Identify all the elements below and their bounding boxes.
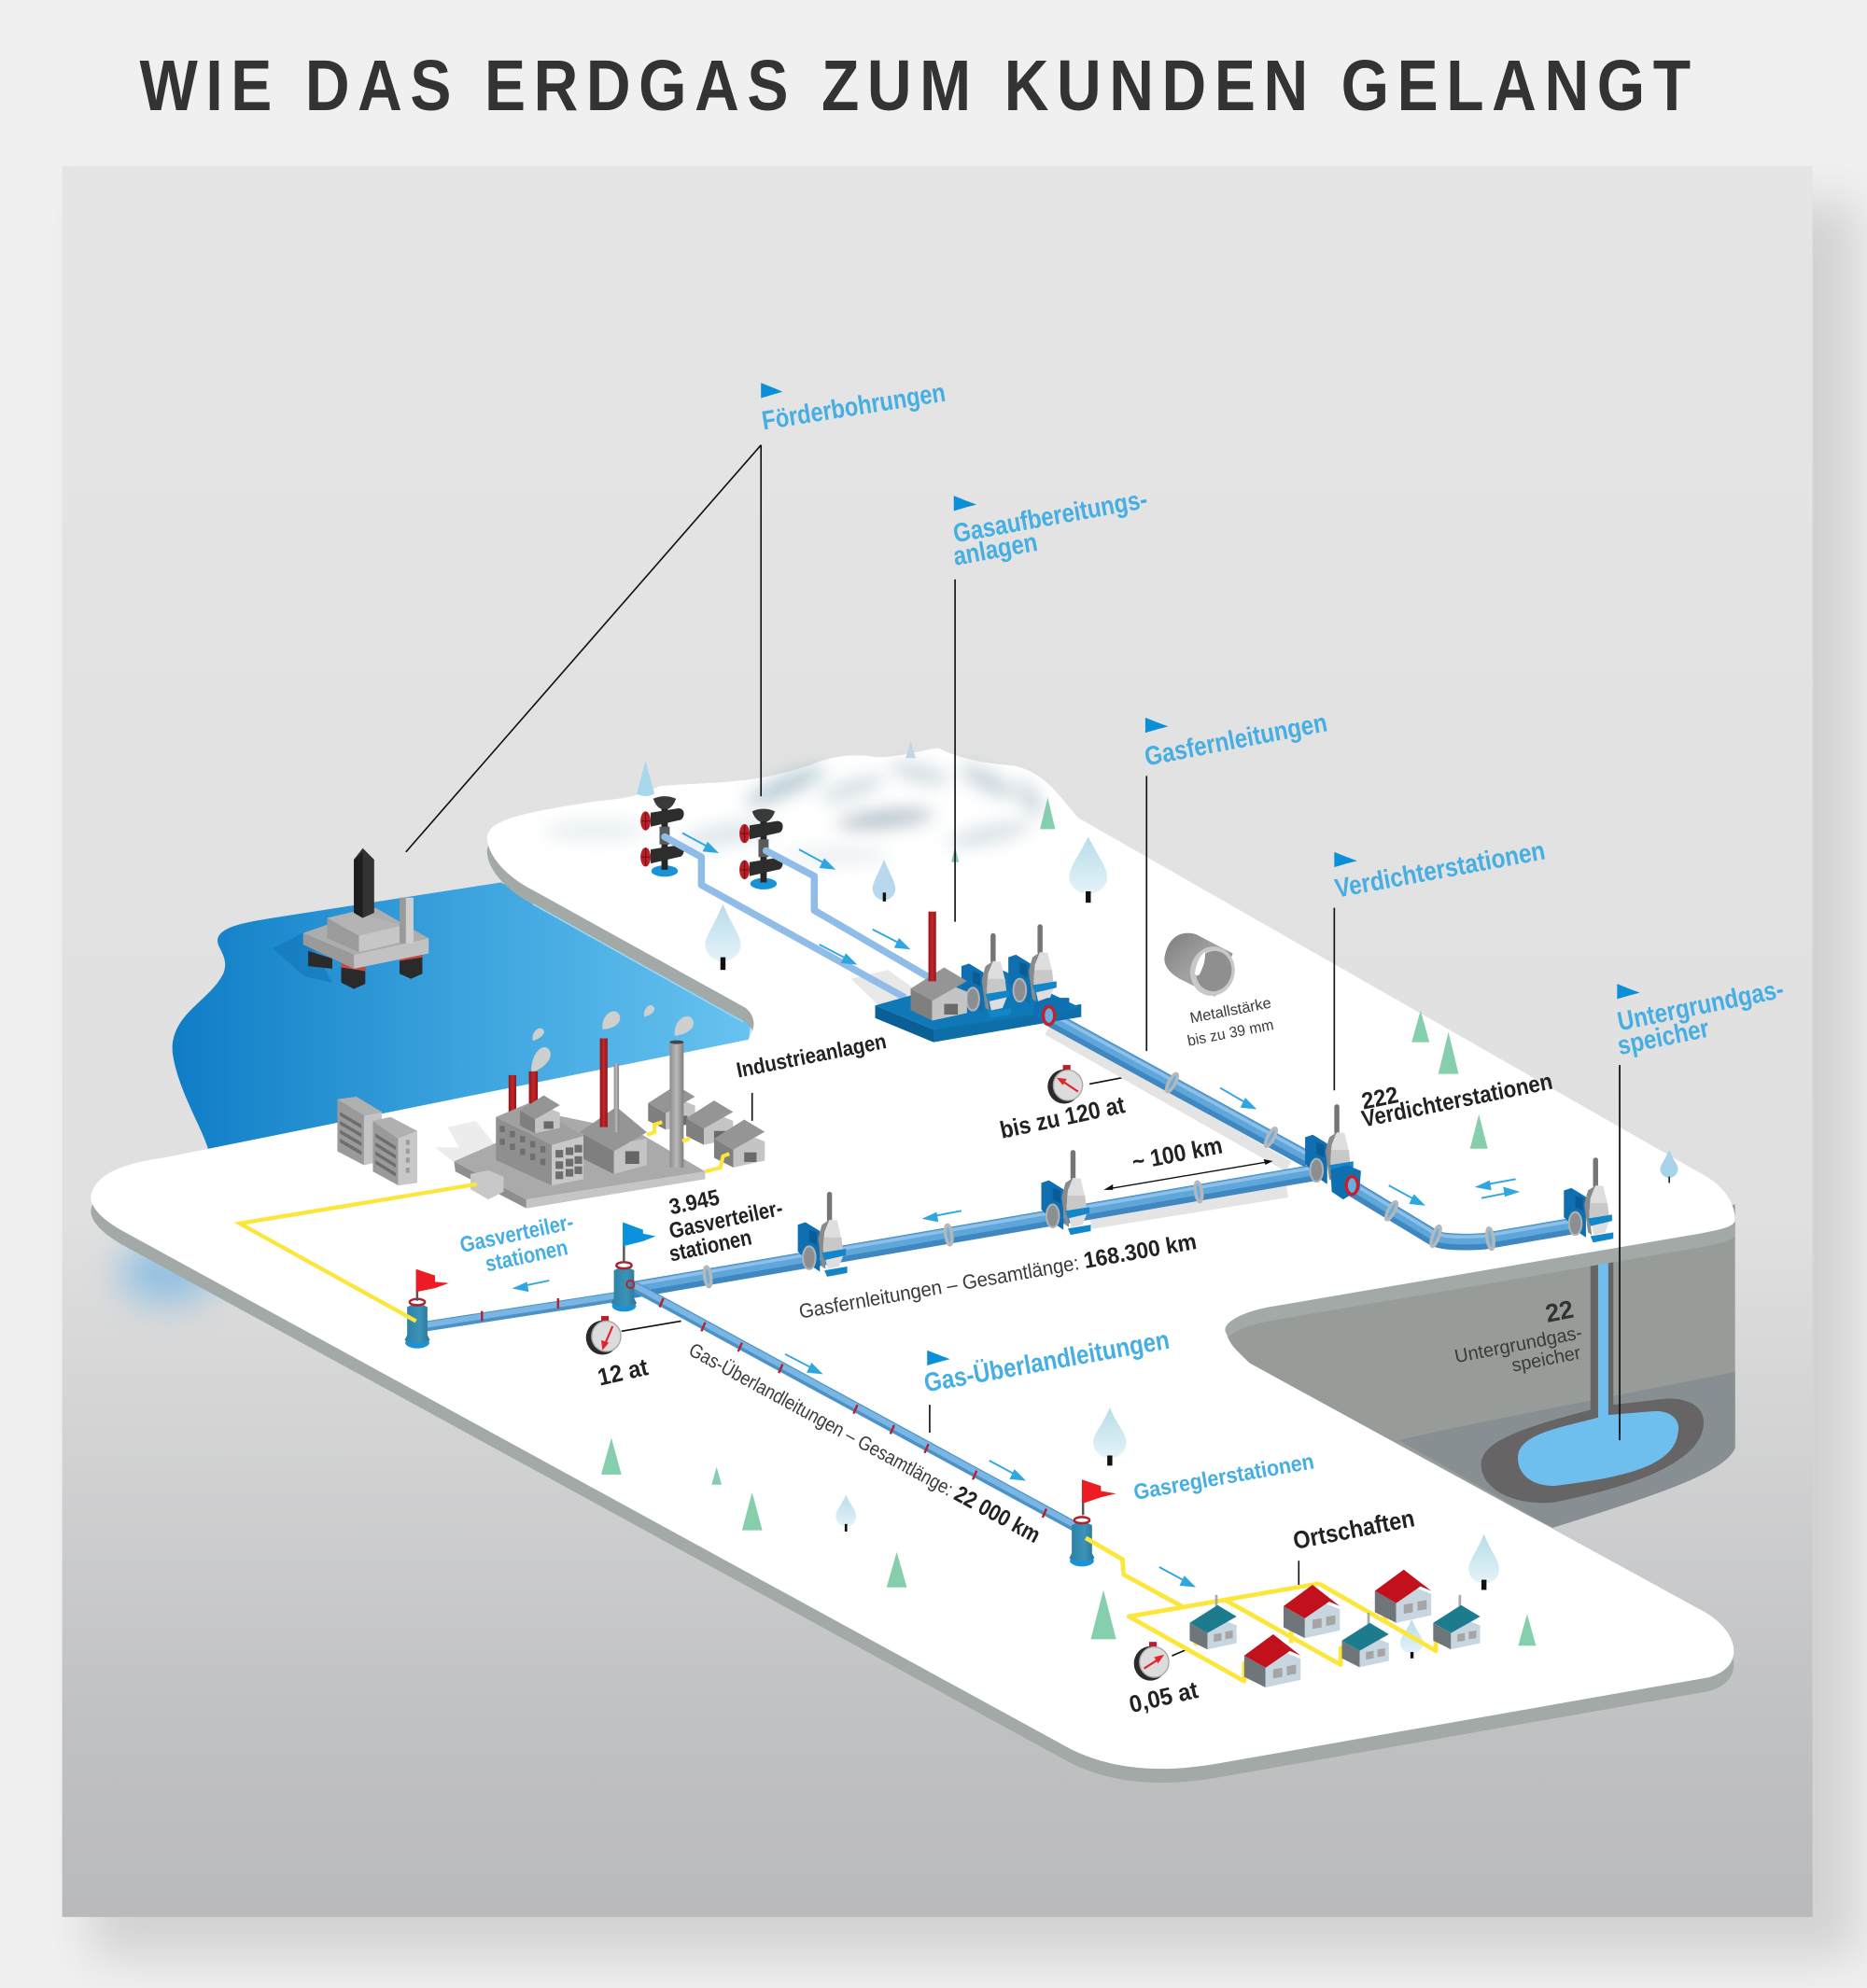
label: 12 at: 12 at xyxy=(596,1354,651,1392)
white platform with snow mountain xyxy=(91,748,1735,1769)
label: Gasfernleitungen: Gasfernleitungen xyxy=(1143,707,1329,772)
label: Ortschaften: Ortschaften xyxy=(1291,1504,1417,1555)
gauge: 0,05 at xyxy=(1134,1642,1169,1681)
label: 100 km: ~ 100 km xyxy=(1130,1133,1225,1176)
label: Metallstärke: bis zu 39 mm xyxy=(1186,1016,1275,1050)
plant ground shadow xyxy=(851,970,933,1015)
compressor station: storage xyxy=(1564,1157,1613,1242)
leader lines xyxy=(406,445,1334,1656)
label: 3.945 Gasverteilerstationen: 3.945 xyxy=(667,1185,722,1220)
label: Gas-Überlandleitungen total length: Gas-Überlandleitungen – Gesamtlänge: 22 000 km xyxy=(685,1337,1045,1548)
label: 3.945 Gasverteilerstationen xyxy=(667,1185,785,1267)
label: Gasaufbereitungsanlagen: Gasaufbereitungs- xyxy=(951,484,1150,549)
label: 22 Untergrundgasspeicher: speicher xyxy=(1510,1343,1582,1377)
label: 0,05 at: 0,05 at xyxy=(1127,1677,1200,1718)
pipe shadows xyxy=(1047,1029,1288,1224)
label: bis zu 120 at: bis zu 120 at xyxy=(998,1092,1128,1144)
wells pipelines xyxy=(665,837,927,997)
storage leader line xyxy=(1619,1065,1621,1440)
label: Gas-Überlandleitungen blue: Gas-Überlandleitungen xyxy=(921,1325,1172,1398)
label: Gasaufbereitungsanlagen xyxy=(951,484,1150,572)
offshore rig xyxy=(273,848,428,989)
compressor station: left xyxy=(798,1192,848,1277)
tree group: cones xyxy=(601,797,1536,1645)
gauge: 120 at xyxy=(1047,1065,1083,1104)
label: Untergrundgasspeicher: speicher xyxy=(1615,1014,1712,1061)
tree group: drop trees xyxy=(637,761,1678,1659)
steam clouds xyxy=(531,1005,694,1072)
bay shoreline xyxy=(533,904,743,1022)
main gas transmission pipes xyxy=(418,1012,1573,1531)
label: Gasverteilerstationen blue xyxy=(457,1210,576,1277)
label: 222 Verdichterstationen: Verdichterstationen xyxy=(1359,1069,1555,1133)
label: Gasreglerstationen: Gasreglerstationen xyxy=(1131,1449,1316,1505)
label: 3.945 Gasverteilerstationen: Gasverteiler- xyxy=(667,1196,785,1244)
red pipe bands xyxy=(482,1298,1046,1518)
houses xyxy=(1189,1570,1481,1687)
label: 22 Untergrundgasspeicher xyxy=(1453,1295,1584,1377)
wellhead 1 xyxy=(640,796,684,876)
regulator station: far left xyxy=(404,1269,449,1349)
wellhead 2 xyxy=(739,809,783,889)
industrial ground shadow xyxy=(435,1121,498,1161)
pipe joints xyxy=(703,1072,1495,1287)
label: Untergrundgasspeicher: Untergrundgas- xyxy=(1615,974,1787,1037)
label: Industrieanlagen: Industrieanlagen xyxy=(735,1029,889,1083)
blue label flags xyxy=(761,383,1640,1365)
sea xyxy=(173,882,752,1153)
gauge: 12 at xyxy=(586,1316,621,1354)
tree: small drops behind ridge xyxy=(905,740,916,758)
label: Untergrundgasspeicher xyxy=(1615,974,1787,1061)
yellow gas network: town xyxy=(1086,1538,1443,1681)
mountain shading xyxy=(543,759,1047,863)
label: 222 Verdichterstationen: 222 xyxy=(1359,1082,1400,1114)
regulator station: distribution xyxy=(611,1223,655,1311)
label: Gasverteilerstationen blue: stationen xyxy=(483,1235,570,1277)
label: Förderbohrungen: Förderbohrungen xyxy=(760,378,948,436)
arrows xyxy=(515,833,1517,1586)
label: 22 Untergrundgasspeicher: 22 xyxy=(1543,1295,1576,1328)
label: Metallstärke: Metallstärke xyxy=(1188,995,1272,1027)
compressor station: middle xyxy=(1041,1150,1090,1235)
distance arrow xyxy=(1106,1160,1270,1189)
label: Gasaufbereitungsanlagen: anlagen xyxy=(951,527,1040,572)
label: Gasfernleitungen total length: Gasfernleitungen – Gesamtlänge: 168.300 km xyxy=(797,1229,1199,1324)
label: Verdichterstationen: Verdichterstationen xyxy=(1333,836,1548,904)
yellow gas line: distribution xyxy=(240,1184,477,1321)
rock cross-section xyxy=(1217,1204,1735,1528)
industrial plant xyxy=(454,1039,765,1209)
platform side rim xyxy=(91,810,1735,1783)
soft blue glow under platform xyxy=(119,1242,216,1303)
compressor station: junction xyxy=(1305,1104,1361,1199)
office blocks xyxy=(337,1097,417,1185)
label: 22 Untergrundgasspeicher: Untergrundgas- xyxy=(1453,1323,1584,1367)
label: Gasverteilerstationen blue: Gasverteiler- xyxy=(457,1210,576,1258)
pipe cross-section icon xyxy=(1164,933,1240,1000)
gas treatment plant xyxy=(876,912,1081,1043)
title: WIE DAS ERDGAS ZUM KUNDEN GELANGT xyxy=(139,47,1691,126)
label: 3.945 Gasverteilerstationen: stationen xyxy=(667,1225,754,1267)
regulator station: Gasregler xyxy=(1069,1479,1116,1566)
label: Metallstärke xyxy=(1186,995,1275,1050)
